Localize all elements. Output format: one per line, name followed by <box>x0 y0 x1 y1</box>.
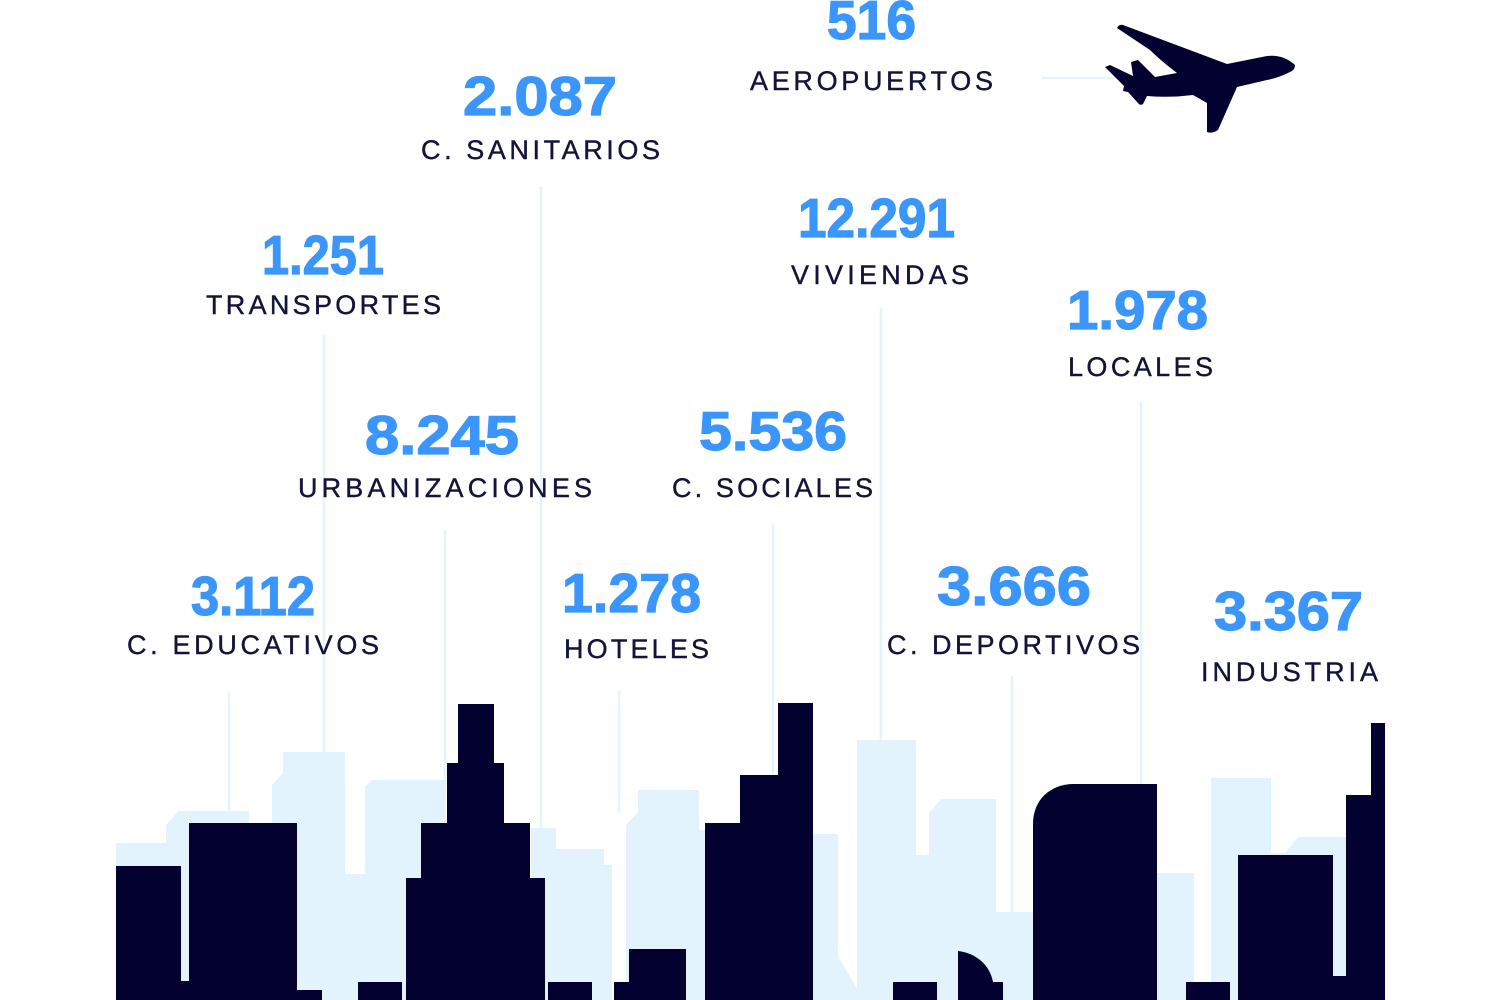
stat: centros sanitarios: C. SANITARIOS <box>421 135 660 165</box>
stat: aeropuertos: AEROPUERTOS <box>750 66 993 96</box>
stat: centros sanitarios: 2.087 <box>463 65 617 127</box>
stat: viviendas: VIVIENDAS <box>791 260 969 290</box>
connector lines <box>229 78 1141 912</box>
stat: centros educativos <box>127 565 379 660</box>
stat: locales <box>1067 279 1213 382</box>
stat: centros sociales: C. SOCIALES <box>672 473 873 503</box>
stat: locales: 1.978 <box>1067 279 1208 341</box>
stat: centros deportivos <box>887 555 1140 660</box>
stat: centros educativos: 3.112 <box>191 565 315 627</box>
stat: hoteles: 1.278 <box>562 562 701 624</box>
stat: transportes: TRANSPORTES <box>206 290 441 320</box>
stat: centros sociales: 5.536 <box>699 400 847 462</box>
stat: centros deportivos: C. DEPORTIVOS <box>887 630 1140 660</box>
stat: industria: 3.367 <box>1214 580 1363 642</box>
stat: viviendas <box>791 187 969 290</box>
stat: industria <box>1201 580 1378 687</box>
stat: transportes: 1.251 <box>262 224 384 286</box>
stat: centros educativos: C. EDUCATIVOS <box>127 630 379 660</box>
stat: urbanizaciones <box>298 404 592 503</box>
stat: centros deportivos: 3.666 <box>937 555 1091 617</box>
dark foreground skyline <box>116 703 1385 1000</box>
stat: locales: LOCALES <box>1068 352 1213 382</box>
icon: airplane <box>1105 25 1295 133</box>
stat: urbanizaciones: URBANIZACIONES <box>298 473 592 503</box>
stat: industria: INDUSTRIA <box>1201 657 1378 687</box>
stat: hoteles: HOTELES <box>564 634 709 664</box>
stat: centros sanitarios <box>421 65 660 165</box>
stat: urbanizaciones: 8.245 <box>365 404 519 466</box>
stat: hoteles <box>562 562 709 664</box>
stat: aeropuertos <box>750 0 993 96</box>
stat: centros sociales <box>672 400 873 503</box>
light background skyline <box>116 740 1350 1000</box>
stat: transportes <box>206 224 441 320</box>
stat: viviendas: 12.291 <box>798 187 955 249</box>
